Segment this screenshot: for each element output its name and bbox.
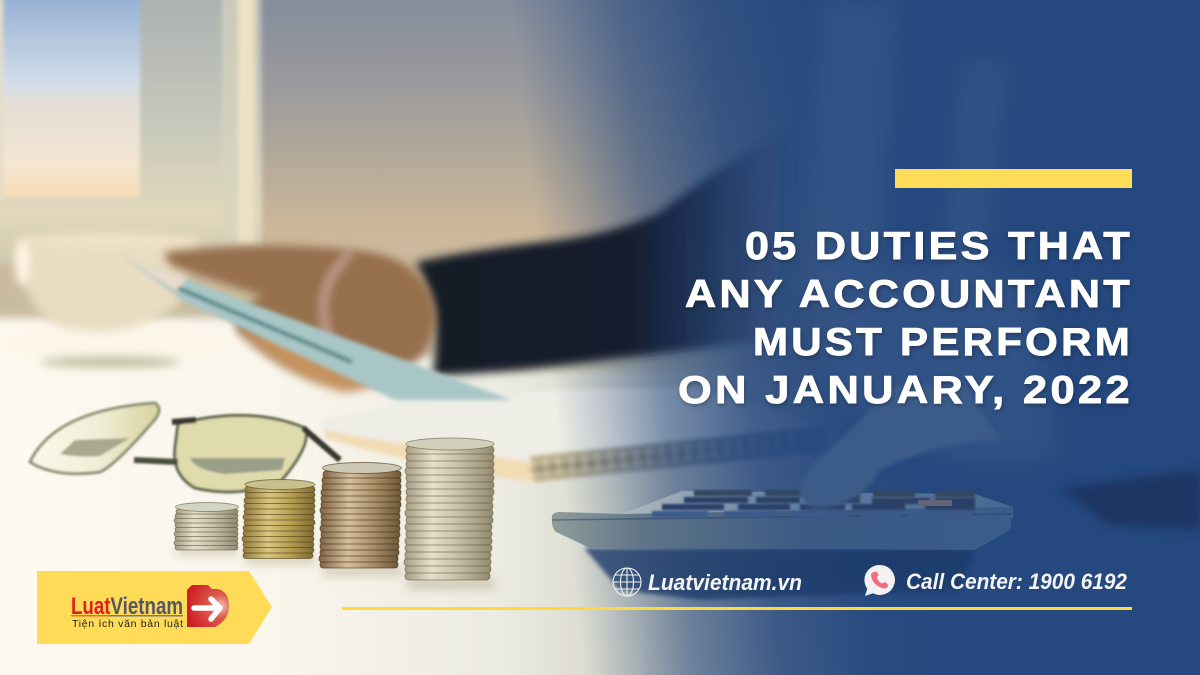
coin stack 3 [319,462,402,568]
hand [165,245,436,392]
glasses [30,403,340,492]
coin stack 2 [242,480,315,558]
pressing finger [800,385,1000,508]
logo tagline: Tiện ích văn bản luật [72,618,183,630]
hand shadow at right [1060,470,1200,530]
soft reflections on hand behind title [810,0,1060,460]
title: ON JANUARY, 2022 [678,369,1133,412]
icon: globe [613,568,641,596]
logo underline [71,615,183,616]
icon: phone chat bubble [864,565,895,596]
accent bar [895,169,1132,188]
coin stack 1 [174,502,238,550]
title: 05 DUTIES THAT [745,225,1133,268]
title: ANY ACCOUNTANT [685,273,1133,316]
notebook [322,388,830,482]
title [678,225,1133,412]
logo icon: red folder with arrow [187,585,229,627]
call center text: Call Center: 1900 6192 [906,569,1128,594]
coin stack 4 [404,438,494,580]
calculator [552,491,1013,600]
title: MUST PERFORM [753,321,1133,364]
calculator keys [652,493,975,514]
sleeve [416,130,830,376]
logo badge [37,571,272,644]
table [0,318,1200,675]
footer rule [342,607,1132,610]
window [0,0,262,265]
coin stack shadows and reflections [176,548,495,590]
logo wordmark: LuatVietnam [71,593,183,620]
coffee cup [0,233,230,368]
tablet [120,254,512,400]
website text: Luatvietnam.vn [648,570,802,595]
